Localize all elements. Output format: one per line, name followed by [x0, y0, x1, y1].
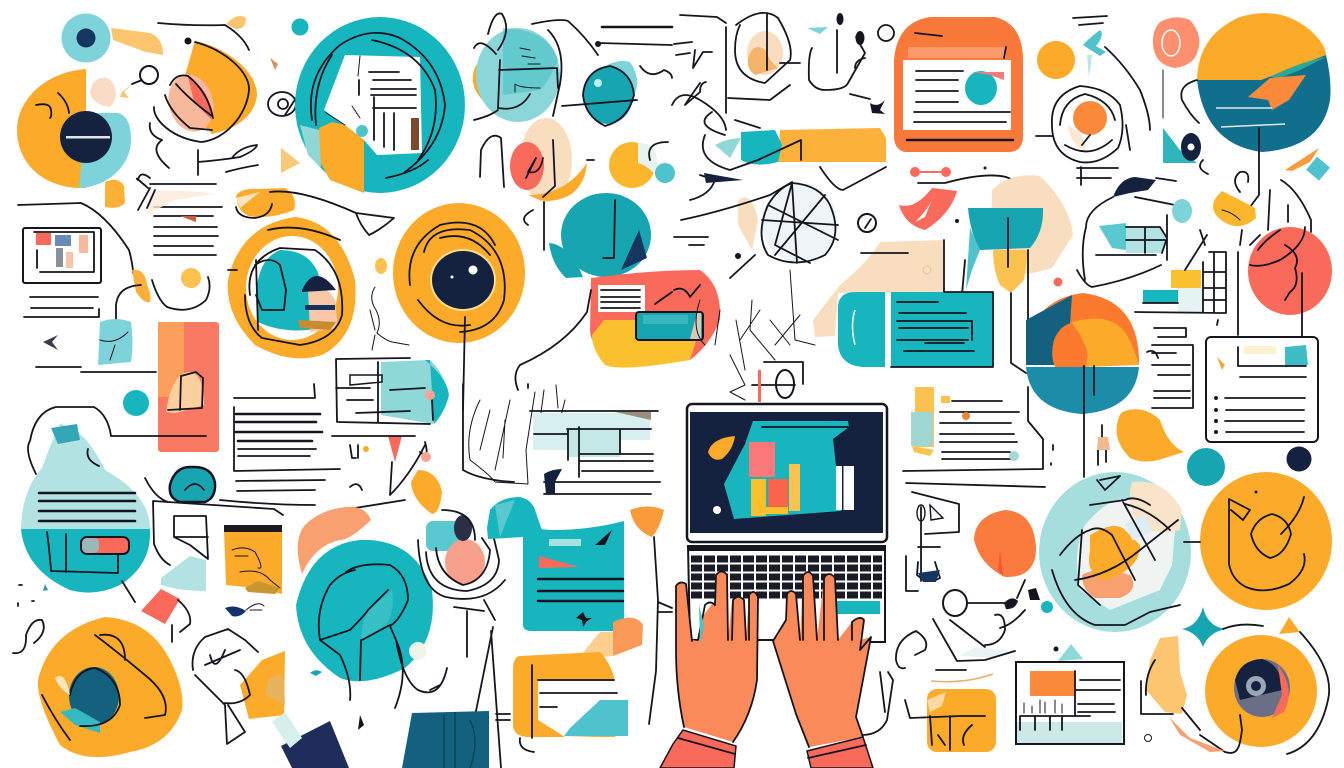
arrow: swooping curve	[1223, 617, 1329, 754]
panel: bordered document with teal corner	[336, 358, 449, 424]
icon: teal globe	[562, 27, 672, 126]
sketch: right curve	[1240, 180, 1311, 245]
icon: orange circle with coral eye	[154, 38, 257, 142]
component: keyboard	[688, 546, 885, 642]
icon: orange note with face	[224, 525, 282, 594]
panel: right hat and table	[1077, 177, 1205, 287]
icon: peach swirl behind teal	[298, 507, 371, 574]
panel: large teal drop with list	[21, 407, 206, 602]
panel: document stack centre left	[234, 384, 340, 491]
icon: yellow ball	[609, 142, 675, 188]
icon: coral bead	[1054, 278, 1062, 286]
sketch: laptop stand marks	[752, 362, 803, 402]
icon: teal face with orange crescent	[473, 13, 598, 122]
panel: pie circle deep teal	[1026, 293, 1139, 477]
icon: small teal dot	[292, 18, 308, 36]
icon: left hand	[660, 572, 758, 768]
sketch: pen and small marks	[332, 436, 431, 508]
sketch: chain with dots	[943, 580, 1053, 645]
sketch lines: top left strokes	[150, 16, 300, 175]
icon: yellow bulb with teal gem	[1097, 409, 1225, 486]
icon: peach and coral figure	[480, 118, 594, 250]
icon: small ring	[1144, 734, 1152, 742]
sketch: bubble outline	[153, 500, 315, 565]
sketch: cracked figure	[370, 287, 409, 350]
icon: navy teardrop marks	[225, 604, 322, 676]
panel: orange folder with mint card	[513, 618, 643, 752]
icon: teal folded flag	[487, 497, 544, 539]
panel: teal ring with swirling hands	[1039, 472, 1191, 632]
arrow: small left arrow	[43, 335, 58, 350]
icon: pale teal tag	[98, 319, 132, 365]
icon: orange rounded box	[905, 670, 996, 752]
icon: orange drop and hook	[116, 268, 210, 320]
panel: grid chart with orange and teal blocks	[1135, 235, 1226, 325]
panel: coral tall card	[36, 322, 219, 452]
icon: orange cape figure	[1141, 636, 1225, 752]
panel: orange screen card	[894, 17, 1023, 152]
panel: small dashboard card	[1016, 662, 1124, 744]
icon: spiral ring	[268, 92, 296, 116]
icon: yellow bird	[1213, 191, 1256, 226]
icon: coral swirl circle	[1248, 227, 1332, 347]
icon: teal pennant with dark bead	[1163, 128, 1201, 163]
panel: teal document card	[838, 292, 993, 367]
sketch: stand with magnifier	[906, 492, 959, 591]
panel: coral card with keyboard page	[515, 270, 720, 390]
icon: coral cup	[899, 166, 1034, 230]
panel: right document card	[1206, 252, 1318, 442]
panel: left tablet chart	[18, 203, 133, 317]
icon: teal wing corner	[1200, 148, 1330, 192]
icon: coral balloon	[1153, 17, 1199, 118]
icon: teal sparkle	[1182, 607, 1225, 647]
icon: peach blob and ring	[90, 66, 158, 107]
panel: teal document folder	[523, 521, 624, 631]
panel: orange round portrait	[228, 217, 356, 358]
icon: orange balloon with stem	[630, 506, 672, 724]
panel: peach mountain with teal cup	[813, 175, 1073, 373]
sketch: wireframe globe	[674, 182, 876, 400]
panel: orange teal banner	[672, 95, 886, 200]
panel: big teal circle with document	[295, 17, 465, 193]
icon: navy dot	[1286, 446, 1312, 472]
icon: small teal dot 2	[123, 390, 149, 416]
icon: yellow petal	[411, 470, 442, 514]
icon: concentric orange target	[1036, 16, 1150, 185]
panel: orange disc with black camera	[1200, 635, 1317, 753]
icon: right hand	[773, 572, 873, 768]
panel: striped document with teal corner, mid	[530, 411, 660, 494]
icon: sleeved forearm	[272, 712, 349, 768]
sketch: hook connector	[862, 672, 893, 735]
panel: orange swirl blob	[236, 188, 394, 235]
icon: teal eye with tab	[62, 14, 163, 62]
panel: top centre frame with beaver	[674, 13, 800, 113]
panel: deep teal pants	[402, 600, 510, 768]
sketch: hand outline	[463, 384, 565, 484]
icon: spectacled figure with coral head	[418, 510, 505, 599]
panel: striped document near laptop	[903, 387, 1053, 487]
panel: mint triangle	[161, 556, 206, 591]
panel: small list card	[1147, 328, 1193, 408]
panel: orange blob with teal lens	[38, 617, 182, 757]
icon: coral orange ball	[974, 510, 1036, 577]
icon: yellow dot	[1037, 41, 1075, 79]
icon: teal rounded mug	[145, 467, 215, 502]
sketch: hand with orange note	[192, 629, 285, 744]
icon: half sun half deep teal circle	[1181, 13, 1330, 207]
sketch: bubble and paper	[896, 619, 1083, 668]
icon: small ink marks and coral flag	[13, 584, 190, 653]
icon: black lens on orange rings	[393, 203, 525, 410]
icon: orange face circle with loop	[1184, 472, 1332, 610]
list: striped document	[105, 174, 222, 255]
icon: orange and teal pie with dark disc	[17, 69, 131, 188]
panel: teal head	[296, 540, 447, 730]
icon: small orange dot	[375, 258, 387, 274]
panel: laptop	[687, 404, 887, 542]
panel: teal dome with wing	[549, 193, 651, 278]
icon: hook cane	[807, 13, 894, 114]
